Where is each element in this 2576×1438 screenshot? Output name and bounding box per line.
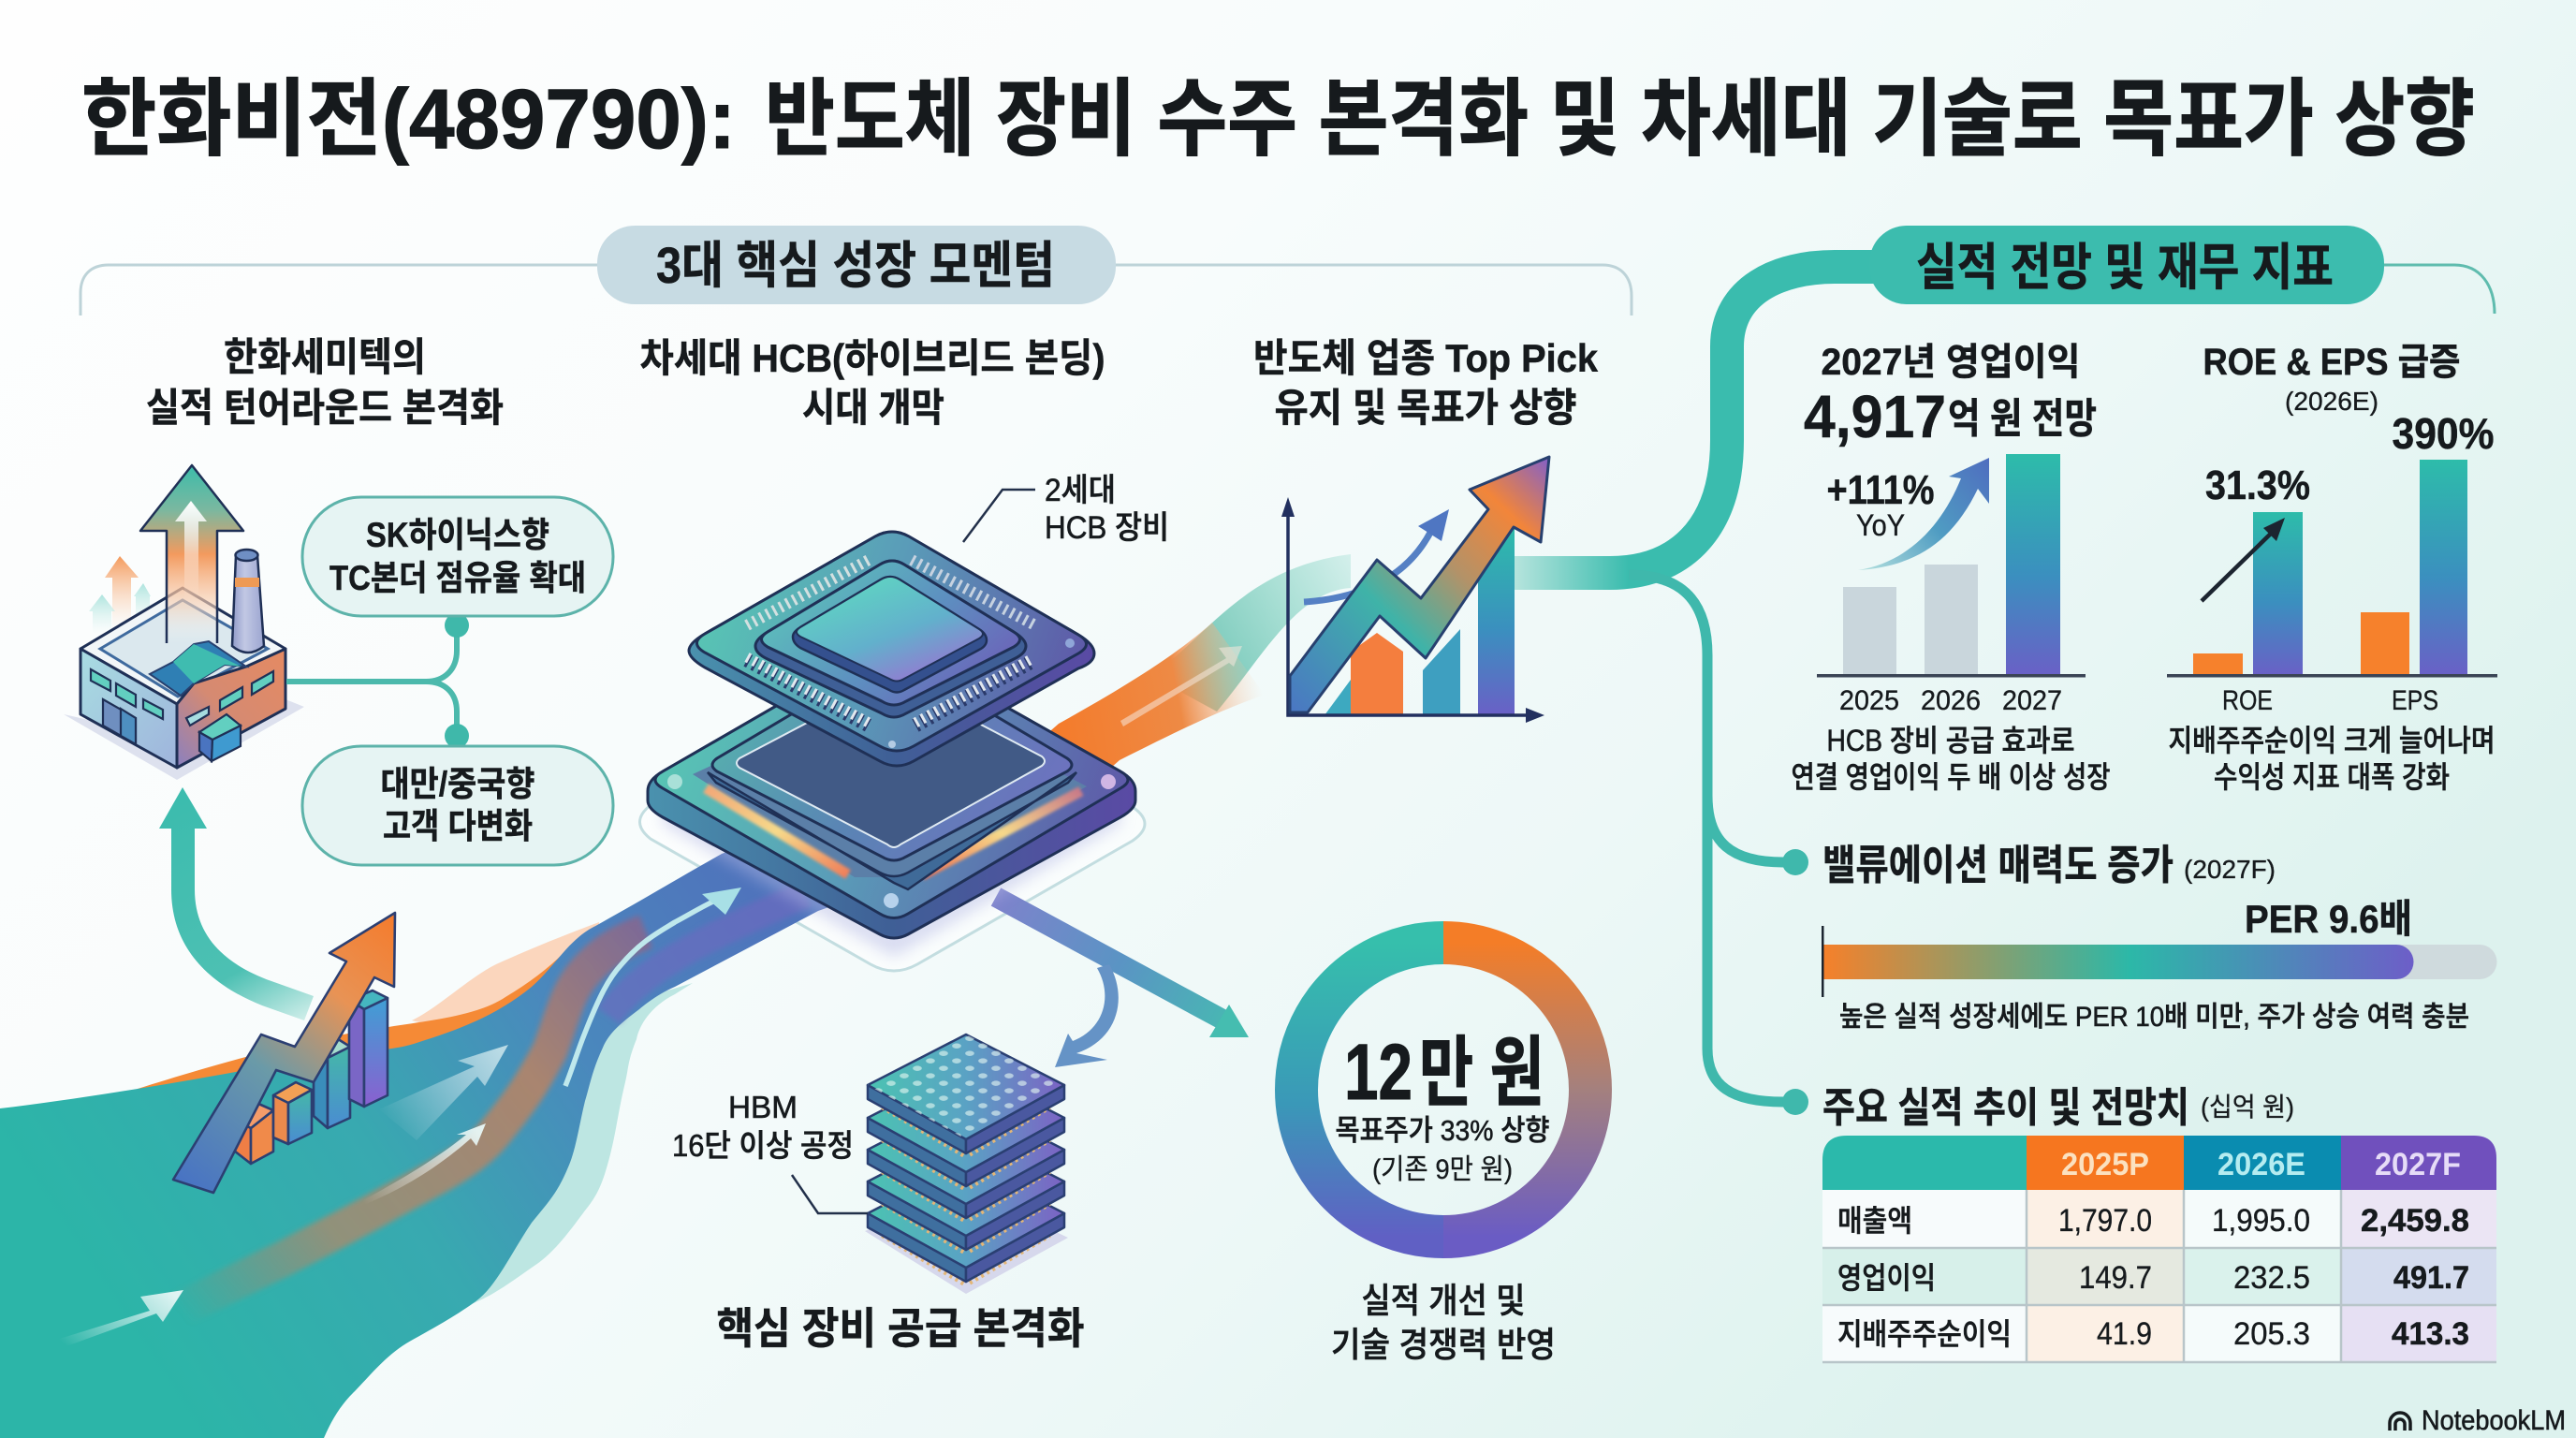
donut: target price: 만 원 (1419, 1031, 1544, 1116)
donut: target price (1296, 943, 1590, 1237)
heading: 한화세미텍: 실적 턴어라운드 본격화 (146, 386, 504, 430)
die side (793, 577, 987, 693)
sub-label: 단위: (십억 원) (2201, 1093, 2294, 1122)
axis (2167, 674, 2497, 678)
chart axes (1288, 506, 1535, 715)
value: PER 9.6배: PER 9.6배 (2245, 897, 2412, 941)
heading: 한화세미텍: 한화세미텍의 (224, 335, 426, 379)
chart: rising target chart (1281, 457, 1549, 723)
title: 한화비전(489790): (81, 73, 736, 167)
bar: ROE before (2193, 653, 2243, 676)
leader: 2세대 HCB 장비: 2세대 (1045, 473, 1116, 508)
bar: 2027 (2006, 454, 2060, 676)
bar: EPS before (2361, 612, 2409, 676)
band: chip to chart (1030, 554, 1351, 782)
row: 지배주주순이익: 413.3 (2392, 1316, 2469, 1352)
factory roof (80, 588, 285, 704)
chip pins (747, 560, 1035, 726)
heading: 주요 실적 추이: 주요 실적 추이 및 전망치 (1822, 1085, 2189, 1131)
table header: 2027F (2375, 1147, 2461, 1182)
leader: HBM label: 16단 이상 공정 (672, 1128, 854, 1163)
icon: upper HCB chip (689, 532, 1094, 766)
panel: valuation (1822, 843, 2497, 1033)
row: 지배주주순이익: 205.3 (2233, 1316, 2310, 1352)
row: 매출액 (1837, 1203, 2469, 1239)
flow river (0, 805, 880, 1438)
dark die (737, 680, 1045, 847)
connector: branches (1629, 575, 1783, 1102)
inner plate surface (712, 659, 1072, 860)
panel: operating profit: 억 원 전망 (1948, 396, 2097, 442)
caption: 연결 영업이익 두 배 이상 성장 (1792, 760, 2110, 794)
axis labels: 2025 (1839, 685, 1899, 716)
sub-label: 2026E: (2026E) (2285, 387, 2378, 416)
figure: 4,917억 원 전망: 4,917 (1804, 383, 1946, 450)
chip halo (640, 674, 1145, 971)
title (81, 73, 2475, 167)
panel: financial table (1822, 1085, 2496, 1362)
bar: 2025 (1843, 587, 1896, 676)
label: 기존: (기존 9만 원) (1372, 1154, 1513, 1185)
bracket: growth momentum (80, 265, 1632, 315)
heading: 차세대 HCB (640, 336, 1105, 430)
row: 매출액: 1,797.0 (2058, 1203, 2152, 1239)
icon: factory (64, 465, 304, 780)
row: 지배주주순이익: 지배주주순이익 (1837, 1317, 2012, 1351)
bar: ROE after (2253, 512, 2303, 676)
table header: 2025P (2061, 1147, 2149, 1182)
bar: PER fill (1822, 945, 2414, 979)
row: 영업이익 (1837, 1260, 2469, 1296)
row: 매출액: 2,459.8 (2361, 1203, 2469, 1239)
axis labels: EPS (2392, 685, 2438, 716)
heading: 밸류에이션: 밸류에이션 매력도 증가 (1822, 843, 2174, 888)
chimney (232, 550, 264, 653)
caption (1792, 724, 2110, 794)
small rising arrows (89, 556, 151, 634)
heading pill: 실적 전망 및 재무 지표: 실적 전망 및 재무 지표 (1916, 240, 2334, 296)
inner plate side (708, 772, 1076, 889)
heading: Top Pick: 반도체 업종 Top Pick (1253, 336, 1599, 380)
icon: lower HCB chip (648, 645, 1135, 957)
heading: ROE & EPS 급증: ROE & EPS 급증 (2203, 342, 2460, 383)
sawtooth roof (150, 641, 246, 696)
chip shadow (663, 800, 1120, 957)
table header (1822, 1136, 2496, 1190)
chart main arrow (1290, 457, 1549, 712)
leader: HBM label (672, 1090, 868, 1213)
label: YoY: YoY (1856, 508, 1905, 542)
middle plate surface (762, 561, 1020, 705)
heading pill: 3대 핵심 성장 모멘텀: 3대 핵심 성장 모멘텀 (656, 238, 1055, 294)
lower board side (648, 645, 1135, 938)
callout: SK하이닉스향: SK하이닉스향 (366, 516, 549, 554)
row: 영업이익: 영업이익 (1837, 1261, 1936, 1295)
row: 영업이익: 491.7 (2393, 1260, 2469, 1296)
icon: HBM stack (865, 1034, 1068, 1294)
caption: 수익성 지표 대폭 강화 (2214, 760, 2450, 794)
caption: 실적 개선: 실적 개선 및 (1361, 1282, 1526, 1320)
table cells (1822, 1190, 2496, 1362)
row: 지배주주순이익: 41.9 (2097, 1316, 2152, 1352)
callout: 대만/중국향: 고객 다변화 (383, 807, 533, 845)
heading pill: 실적 전망 및 재무 지표 (1869, 226, 2384, 304)
ring left half (1296, 943, 1443, 1237)
row: 지배주주순이익 (1837, 1316, 2469, 1352)
arrow: teal up to factory (159, 787, 314, 1020)
leader: HBM label: HBM (728, 1090, 798, 1124)
heading: 핵심 장비 공급 본격화: 핵심 장비 공급 본격화 (717, 1304, 1084, 1353)
axis labels: ROE (2222, 685, 2273, 716)
chart bars (1325, 527, 1515, 715)
arrow: chip to HBM (1055, 964, 1119, 1067)
die surface (797, 577, 983, 682)
bullet dots (1782, 849, 1808, 1115)
lower board surface (655, 645, 1128, 917)
axis labels (1839, 685, 2062, 716)
axis labels (2222, 685, 2438, 716)
callout: SK하이닉스향 (302, 497, 613, 616)
leader: 2세대 HCB 장비 (963, 473, 1169, 546)
icon: mini rising bar chart (173, 913, 395, 1193)
middle plate side (755, 561, 1026, 717)
label: +111%: +111% (1827, 467, 1934, 513)
caption (2168, 724, 2496, 794)
caption: 높은 실적 성장세에도 PER 10배 미만, 주가 상승 여력 충분 (1839, 1002, 2469, 1033)
panel: operating profit (1792, 342, 2110, 794)
leader: 2세대 HCB 장비: HCB 장비 (1045, 510, 1169, 546)
arrow: band highlight (1120, 646, 1242, 726)
connector: thick teal spine (1515, 267, 1877, 573)
connector: factory to callouts (286, 613, 469, 748)
tick (1822, 926, 1823, 997)
caption: HCB 장비 공급 효과로 (1827, 724, 2074, 757)
heading: Top Pick: 유지 및 목표가 상향 (1275, 386, 1576, 430)
bar: PER track (1822, 945, 2497, 979)
callout: 대만/중국향 (302, 746, 613, 865)
row: 영업이익: 149.7 (2079, 1260, 2152, 1296)
heading: 한화세미텍 (146, 335, 504, 430)
caption: 실적 개선: 기술 경쟁력 반영 (1331, 1326, 1556, 1364)
heading: 차세대 HCB: 차세대 HCB(하이브리드 본딩) (640, 336, 1105, 380)
panel: ROE and EPS (2167, 342, 2497, 794)
upper board side (689, 532, 1094, 766)
arrow: flow highlight to chip (565, 888, 741, 1086)
callout: SK하이닉스향: TC본더 점유율 확대 (329, 559, 586, 597)
heading: 차세대 HCB: 시대 개막 (802, 386, 944, 430)
chart curved arrow (1304, 529, 1432, 602)
recess and glow (693, 683, 1087, 877)
right bracket line (2384, 265, 2495, 314)
arrow: flow highlight middle (349, 1123, 486, 1211)
heading: Top Pick (1253, 336, 1599, 430)
value: 390%: 390% (2393, 409, 2494, 458)
heading: 2027년 영업이익: 2027년 영업이익 (1822, 342, 2080, 383)
value: 12만 원: 12 (1344, 1028, 1412, 1116)
arrow: ROE rise (2202, 518, 2285, 601)
arrow: YoY growth (1858, 458, 1989, 570)
ring right half (1443, 943, 1590, 1237)
axis labels: 2026 (1921, 685, 1981, 716)
big rising arrow (140, 465, 243, 643)
upper board surface (696, 532, 1086, 751)
row: 매출액: 매출액 (1837, 1204, 1912, 1238)
row: 영업이익: 232.5 (2233, 1260, 2310, 1296)
row: 매출액: 1,995.0 (2212, 1203, 2310, 1239)
axis (1817, 674, 2086, 678)
value: 31.3%: 31.3% (2205, 462, 2310, 508)
factory walls (80, 649, 177, 768)
caption: 지배주주순이익 크게 늘어나며 (2168, 724, 2496, 757)
sub-label: 2027F: (2027F) (2184, 855, 2276, 884)
label: 목표주가: 목표주가 33% 상향 (1335, 1114, 1550, 1147)
arrow: flow highlight lower (51, 1290, 183, 1350)
arrow: chip to target (996, 897, 1249, 1037)
axis labels: 2027 (2002, 685, 2062, 716)
arrow: flow highlight upper (379, 1045, 508, 1140)
callout: 대만/중국향: 대만/중국향 (380, 765, 535, 803)
table header: 2026E (2217, 1147, 2305, 1182)
caption: 실적 개선 (1331, 1282, 1556, 1364)
bar: 2026 (1925, 565, 1978, 676)
windows and door (91, 669, 273, 761)
heading pill: 3대 핵심 성장 모멘텀 (597, 226, 1116, 304)
bar: EPS after (2420, 460, 2467, 676)
